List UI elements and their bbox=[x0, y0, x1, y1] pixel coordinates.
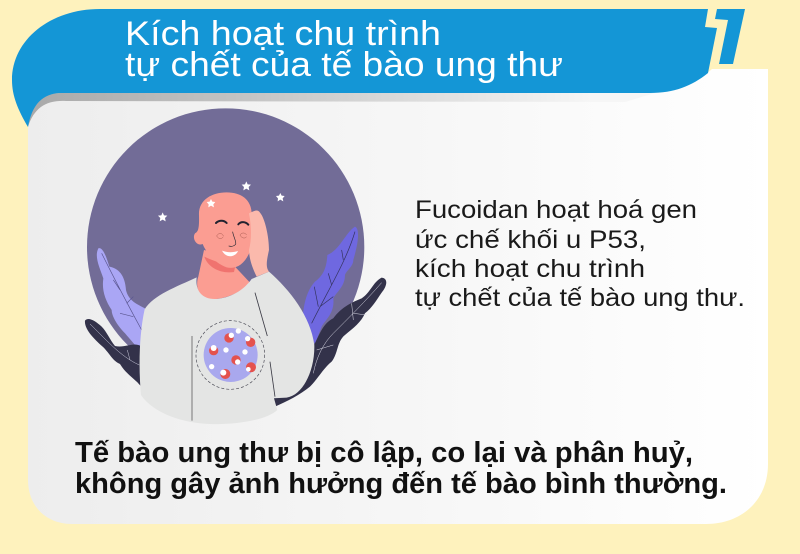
neck bbox=[197, 250, 250, 299]
banner accent bbox=[715, 9, 745, 64]
conclusion text: không gây ảnh hưởng đến tế bào bình thường. bbox=[75, 468, 727, 500]
nose bbox=[229, 232, 236, 246]
smile bbox=[222, 251, 238, 256]
title text bbox=[125, 15, 563, 84]
title text: Kích hoạt chu trình bbox=[125, 15, 441, 53]
description text: kích hoạt chu trình bbox=[415, 255, 645, 283]
description text bbox=[415, 196, 745, 312]
conclusion text bbox=[75, 437, 727, 500]
chest cell dish bbox=[196, 321, 265, 389]
leaf: violet right bbox=[303, 227, 358, 344]
dashed ring bbox=[196, 321, 265, 389]
cancer cells bbox=[209, 333, 256, 379]
white cells bbox=[209, 328, 251, 376]
head bbox=[194, 192, 252, 268]
description text: Fucoidan hoạt hoá gen bbox=[415, 196, 697, 224]
sweater body bbox=[140, 272, 314, 424]
header shadow strip bbox=[28, 93, 655, 127]
leaf: lilac left bbox=[97, 248, 145, 357]
title text: tự chết của tế bào ung thư bbox=[125, 46, 563, 84]
sweater seam bbox=[190, 336, 193, 421]
star on head bbox=[207, 199, 215, 207]
stars bbox=[158, 181, 285, 221]
title banner bbox=[12, 9, 745, 127]
neck shadow bbox=[204, 257, 235, 272]
leaf: dark right bbox=[270, 278, 386, 407]
conclusion text: Tế bào ung thư bị cô lập, co lại và phân huỷ, bbox=[75, 437, 693, 469]
hand bbox=[249, 211, 269, 277]
content card bbox=[28, 69, 768, 524]
illustration: patient with glowing cells bbox=[85, 108, 386, 424]
leaf: dark left bbox=[85, 319, 142, 387]
description text: tự chết của tế bào ung thư. bbox=[415, 284, 745, 312]
eyebrows bbox=[216, 221, 248, 225]
description text: ức chế khối u P53, bbox=[415, 226, 646, 254]
sleeve folds bbox=[255, 293, 275, 397]
closed eyes bbox=[217, 233, 247, 239]
dish bbox=[204, 328, 258, 382]
banner shape bbox=[12, 9, 717, 127]
purple circle bbox=[87, 108, 364, 386]
